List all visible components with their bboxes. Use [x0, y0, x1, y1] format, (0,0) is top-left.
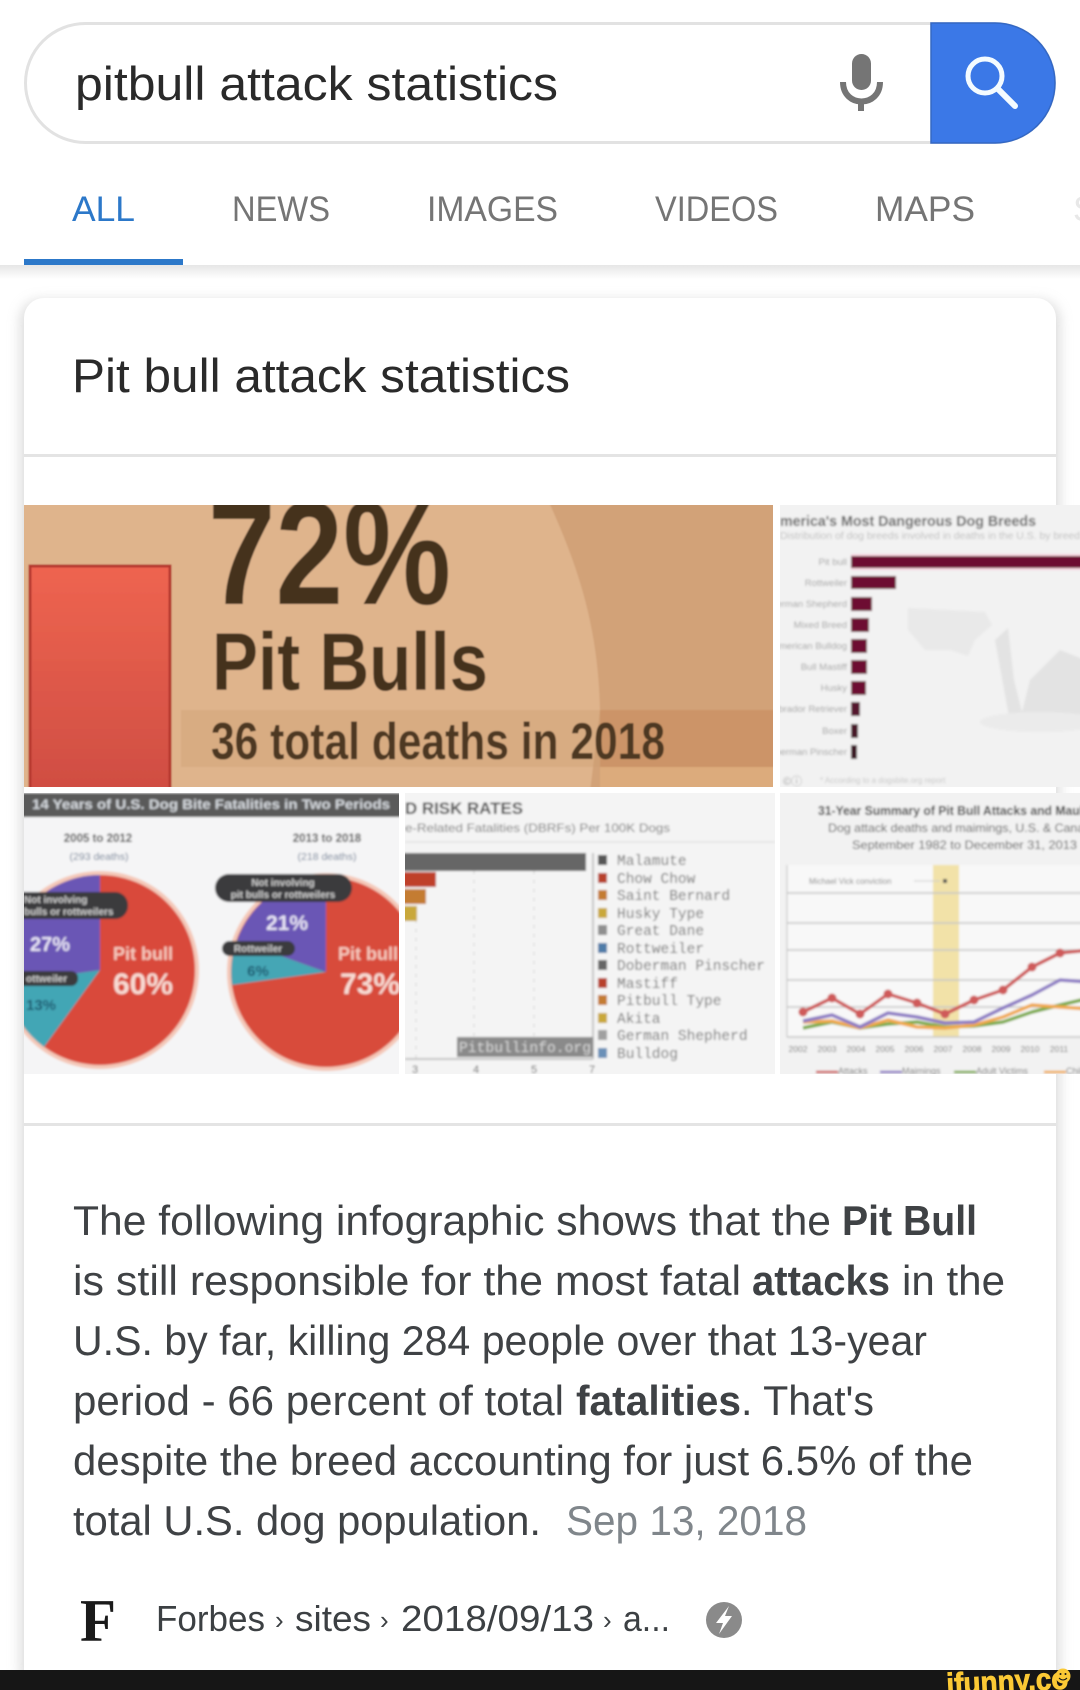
gridlines [416, 853, 534, 1058]
pie 2005 to 2012: bulls or rottweilers [24, 907, 114, 918]
result snippet text: U.S. by far, killing 284 people over that 13-year [73, 1317, 927, 1364]
data lines [803, 950, 1080, 1028]
red bar [30, 566, 170, 791]
source breadcrumb: › [603, 1605, 612, 1635]
legend: Bulldog [617, 1047, 678, 1063]
icon: magnifier [968, 59, 1015, 106]
legend: Mastiff [617, 977, 678, 993]
legend: Chow Chow [617, 872, 696, 888]
pie 2013 to 2018: 21% [266, 912, 308, 935]
image: most dangerous breeds bar chart: Distribution of dog breeds involved in deaths in the U.S. by breed [780, 531, 1080, 542]
year labels: 2006 [905, 1044, 924, 1054]
breed labels: Doberman Pinscher [763, 747, 847, 758]
breed labels: Boxer [822, 726, 847, 737]
legend: Attacks [838, 1066, 868, 1076]
search header [0, 0, 1080, 279]
year labels: 2003 [818, 1044, 837, 1054]
year labels: 2009 [992, 1044, 1011, 1054]
tab: maps: MAPS [875, 190, 975, 229]
image: pie charts two periods: 14 Years of U.S. Dog Bite Fatalities in Two Periods [32, 797, 390, 812]
result snippet text: . That's [741, 1377, 874, 1424]
legend: Great Dane [617, 924, 704, 940]
result snippet text: total U.S. dog population. [73, 1497, 541, 1544]
pit bulls label: Pit Bulls [212, 617, 488, 708]
pie 2005 to 2012: (293 deaths) [70, 851, 128, 863]
result snippet text: in the [902, 1257, 1005, 1304]
map and dog watermark [910, 610, 1080, 716]
annotation: Michael Vick conviction [809, 877, 892, 886]
axis ticks: 5 [531, 1064, 537, 1076]
breed labels: Husky [821, 683, 847, 694]
breed labels: Bull Mastiff [801, 662, 847, 673]
icon: amp bolt [706, 1602, 742, 1638]
image: risk rates bar chart [400, 790, 780, 1080]
pie 2013 to 2018: (218 deaths) [298, 851, 356, 863]
chart title: merica's Most Dangerous Dog Breeds [780, 514, 1036, 530]
header band [20, 793, 404, 817]
pie 2013 to 2018: 2013 to 2018 [293, 833, 362, 845]
breed labels: Pit bull [818, 557, 847, 568]
pie 2005 to 2012: 27% [30, 934, 70, 956]
pie 2005 to 2012: 2005 to 2012 [64, 833, 132, 845]
total deaths label: 36 total deaths in 2018 [211, 713, 665, 771]
axis ticks: 4 [473, 1064, 479, 1076]
year labels: 2008 [963, 1044, 982, 1054]
search query text: pitbull attack statistics [75, 57, 558, 110]
source breadcrumb: a... [623, 1598, 670, 1639]
pie 2013 to 2018: 6% [247, 963, 269, 980]
result snippet text: Pit Bull [842, 1197, 977, 1244]
legend: Maimings [902, 1066, 941, 1076]
icon: microphone [843, 54, 880, 111]
image: 31-year line chart [776, 790, 1080, 1080]
legend: Doberman Pinscher [617, 959, 765, 975]
pie 2013 to 2018: 73% [340, 968, 400, 1001]
source breadcrumb: 2018/09/13 [401, 1598, 594, 1639]
result snippet text: attacks [752, 1257, 890, 1304]
legend: Akita [617, 1012, 661, 1028]
pie 2013 to 2018: pit bulls or rottweilers [231, 890, 336, 901]
breed labels: American Bulldog [773, 641, 847, 652]
breed labels: German Shepherd [769, 599, 847, 610]
pie 2013 to 2018 [214, 832, 399, 1072]
icon: smiley [1056, 1668, 1070, 1684]
pie 2013 to 2018: Not involving [251, 878, 315, 889]
legend: Malamute [617, 854, 687, 870]
tab: images: IMAGES [427, 190, 558, 229]
year labels: 2011 [1050, 1044, 1068, 1054]
pie 2013 to 2018: Rottweiler [234, 944, 282, 955]
source breadcrumb [156, 1598, 670, 1639]
pie 2005 to 2012 [24, 832, 200, 1070]
watermark badge: Pitbullinfo.org [459, 1040, 591, 1057]
axis ticks: 7 [589, 1064, 595, 1076]
pie 2005 to 2012: ottweiler [26, 974, 67, 985]
year labels: 2010 [1021, 1044, 1040, 1054]
breed labels [780, 558, 848, 756]
legend: Rottweiler [617, 942, 704, 958]
result snippet text: period - 66 percent of total [73, 1377, 564, 1424]
result snippet text: is still responsible for the most fatal [73, 1257, 741, 1304]
tab: videos: VIDEOS [655, 190, 778, 229]
pie 2013 to 2018: Pit bull [338, 944, 398, 964]
active tab underline [24, 259, 183, 265]
result snippet text: despite the breed accounting for just 6.5% of the [73, 1437, 973, 1484]
breed labels: Mixed Breed [794, 620, 847, 631]
pie 2005 to 2012: Pit bull [113, 944, 173, 964]
pie 2005 to 2012: 13% [26, 997, 56, 1014]
card heading: Pit bull attack statistics [72, 349, 570, 402]
card shadow [20, 300, 1060, 1690]
axis ticks: 3 [412, 1064, 418, 1076]
source breadcrumb: › [275, 1605, 284, 1635]
image: pie charts two periods [24, 793, 399, 1074]
search box [26, 23, 1055, 143]
breed labels: Labrador Retriever [768, 704, 847, 715]
plot area [787, 865, 1080, 1037]
image: risk rates bar chart: e-Related Fatalities (DBRFs) Per 100K Dogs [405, 821, 670, 835]
legend: Adult Victims [976, 1066, 1028, 1076]
headline number: 72% [208, 471, 451, 636]
year labels: 2004 [847, 1044, 866, 1054]
year labels: 2002 [789, 1044, 808, 1054]
bars [400, 853, 586, 871]
pie 2005 to 2012: Not involving [24, 895, 87, 906]
pie 2005 to 2012: 60% [113, 968, 173, 1001]
source breadcrumb: sites [295, 1598, 371, 1639]
tab: news: NEWS [232, 190, 330, 229]
source note: * According to a dogsbite.org report [820, 776, 946, 785]
source breadcrumb: › [380, 1605, 389, 1635]
year labels [788, 1045, 1068, 1053]
result snippet text: fatalities [576, 1377, 741, 1424]
axis ticks [412, 1064, 596, 1074]
watermark footer bar [0, 1661, 1080, 1690]
result snippet text: The following infographic shows that the [73, 1197, 831, 1244]
icon: forbes logo: F [80, 1588, 116, 1654]
tabs [24, 190, 1080, 265]
search button [931, 23, 1055, 143]
image: most dangerous breeds bar chart: ©ⓘ [783, 775, 802, 788]
legend [598, 854, 765, 1063]
source row [80, 1588, 742, 1654]
image: 31-year line chart: September 1982 to December 31, 2013 [852, 838, 1077, 852]
legend: Saint Bernard [617, 889, 730, 905]
legend [814, 1066, 1080, 1074]
legend: Pitbull Type [617, 994, 721, 1010]
result snippet text [73, 1197, 1005, 1544]
legend: German Shepherd [617, 1029, 748, 1045]
source breadcrumb: Forbes [156, 1598, 265, 1639]
image: most dangerous breeds bar chart [763, 500, 1080, 792]
tab: all: ALL [72, 190, 135, 229]
year labels: 2005 [876, 1044, 895, 1054]
year labels: 2007 [934, 1044, 953, 1054]
image: 72% pit bulls [24, 505, 773, 787]
chart title: D RISK RATES [405, 799, 523, 818]
breed labels: Rottweiler [805, 578, 847, 589]
bars [851, 554, 1080, 759]
legend: Husky Type [617, 907, 704, 923]
snippet date: Sep 13, 2018 [566, 1497, 807, 1544]
